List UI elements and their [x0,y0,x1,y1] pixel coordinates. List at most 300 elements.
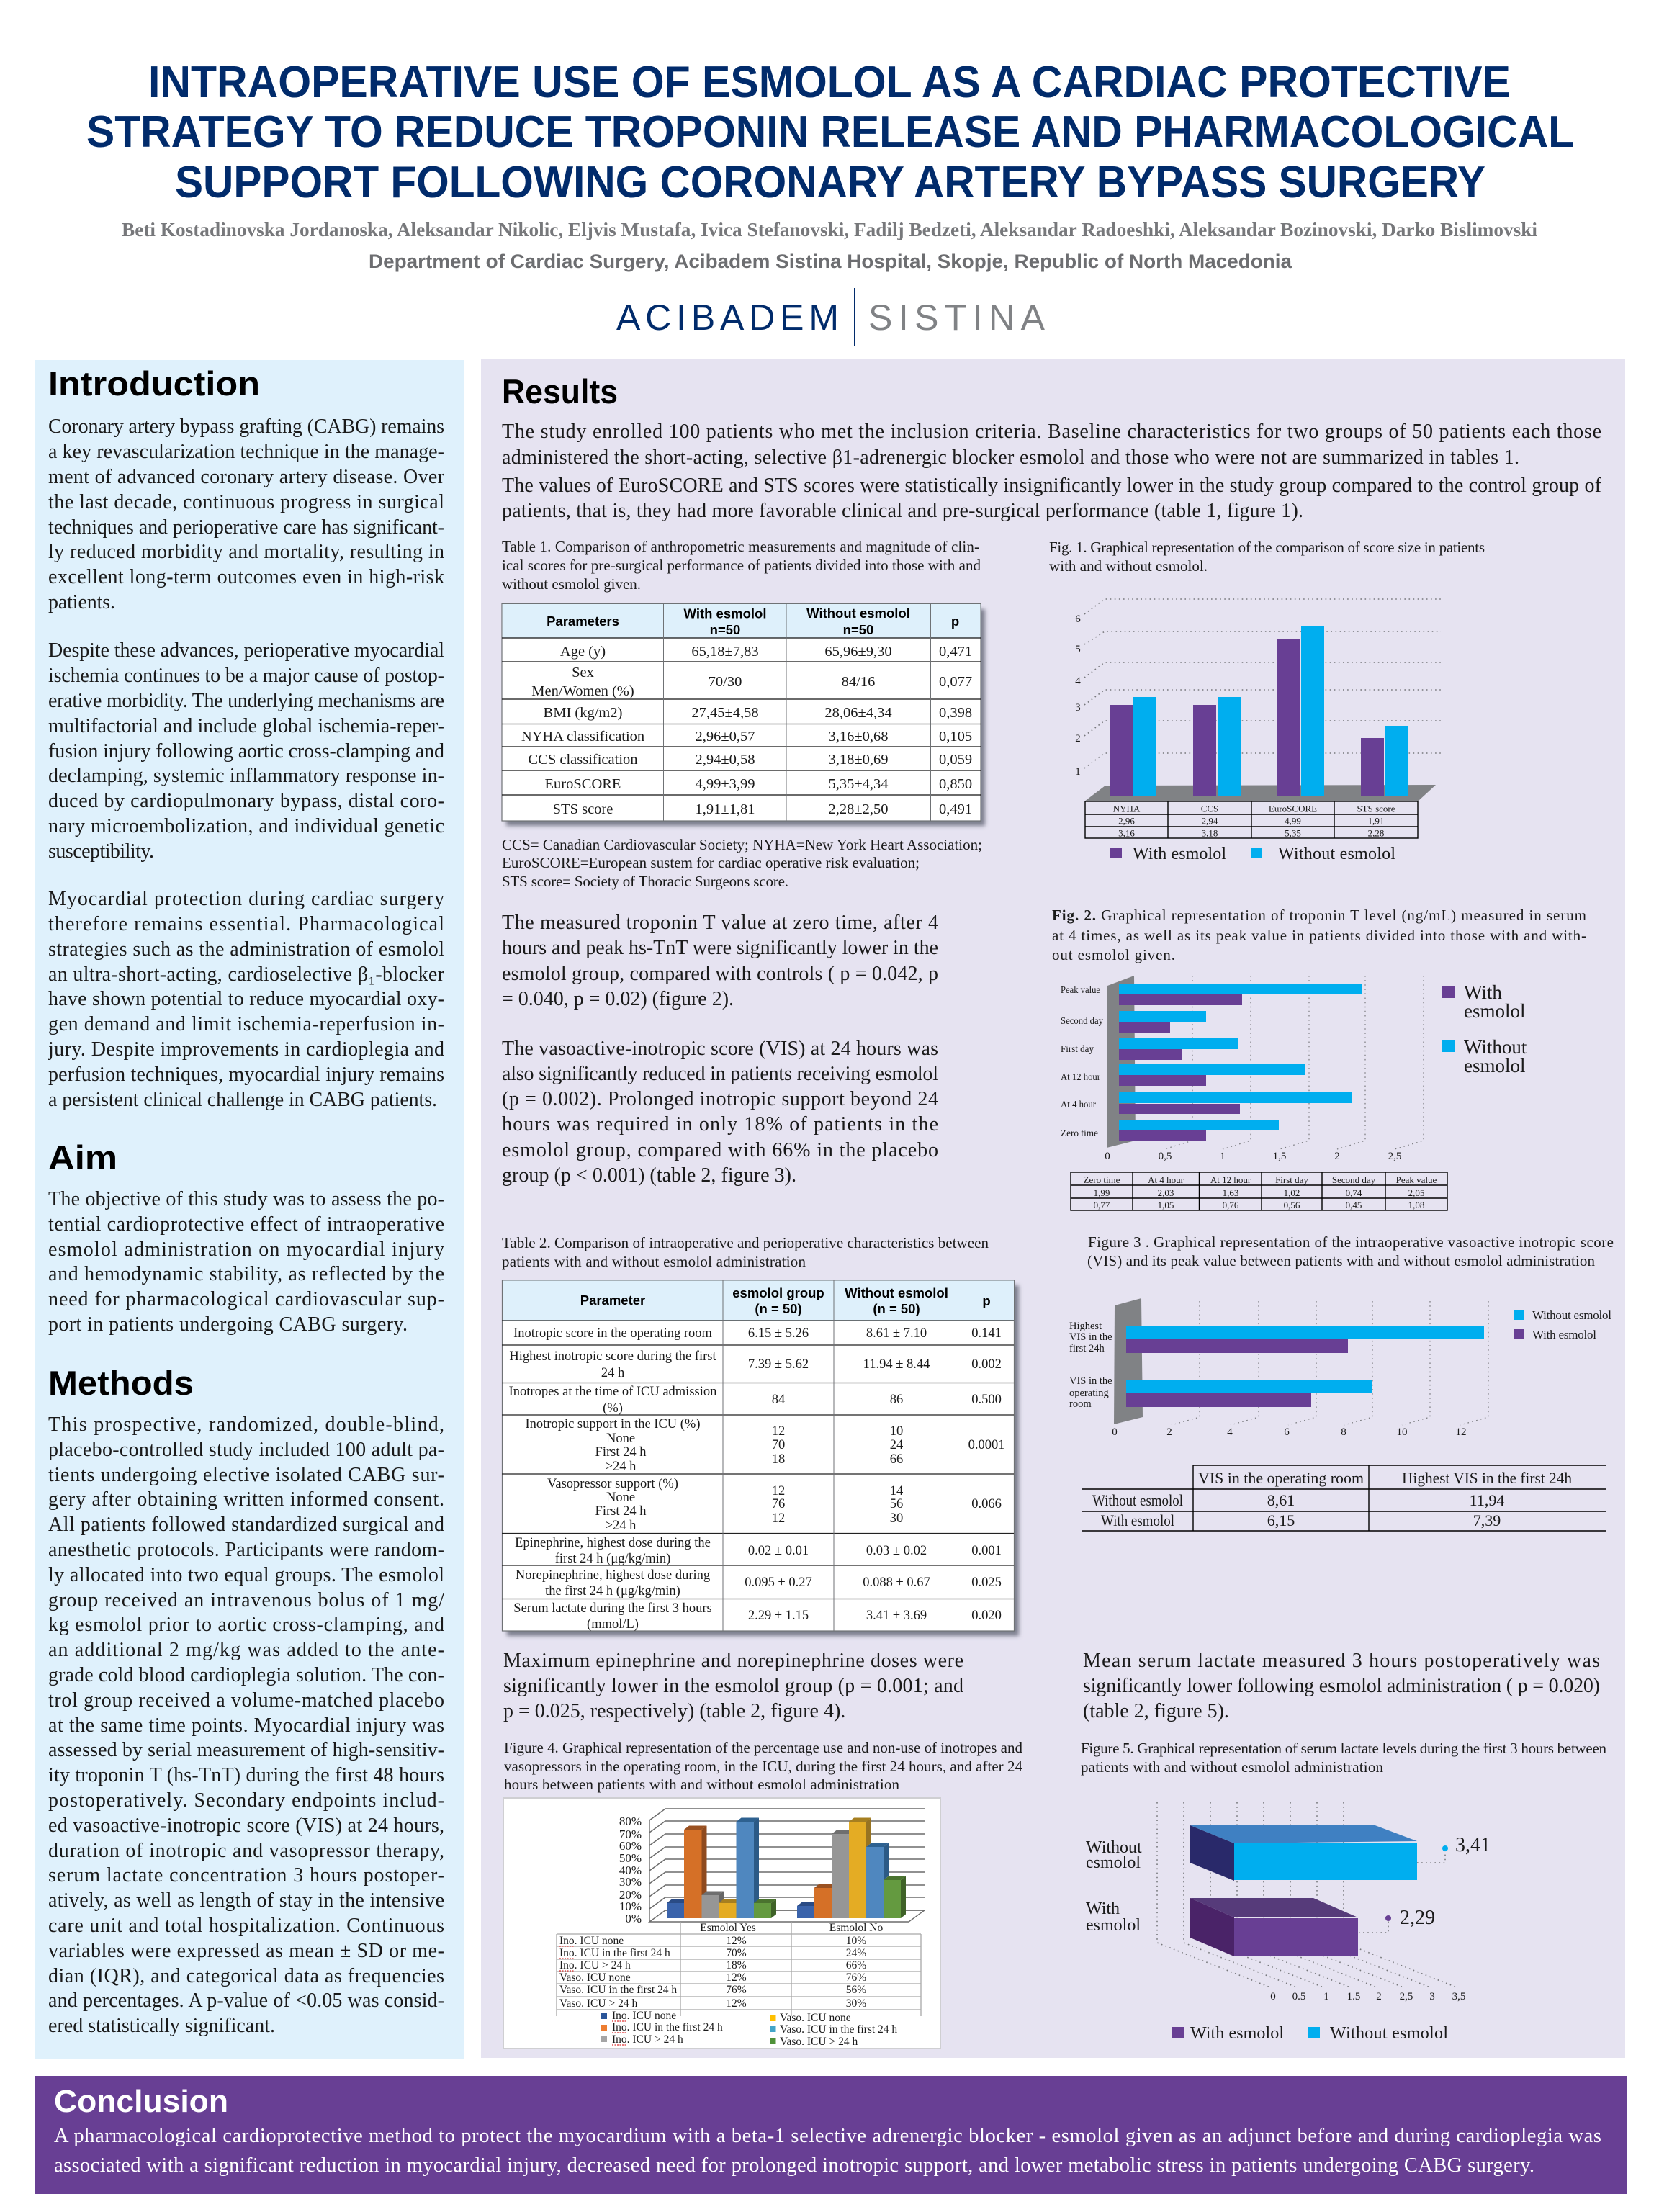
figure 2: At 12 hour [1061,1071,1100,1082]
figure 3 [1069,1233,1614,1531]
table 2: 2.29 ± 1.15 [748,1609,809,1623]
caption: table 1 [502,538,981,593]
figure 1: 5 [1075,644,1081,655]
figure 2: 2,5 [1388,1151,1401,1162]
data table: figure 4: 18% [726,1959,747,1972]
figure 5: With [1086,1899,1120,1918]
data table: figure 4: Esmolol No [830,1922,883,1934]
text: introduction: a persistent clinical challenge in CABG patients. [48,1089,437,1111]
table 2: Serum lactate during the first 3 hours [513,1601,712,1616]
logo: Acibadem Sistina: SISTINA [868,297,1046,338]
table 1: CCS classification [528,752,638,768]
figure 4: 80% [619,1815,642,1828]
text: troponin results: hours was required in only 18% of patients in the [502,1113,938,1136]
figure 1: 3,16 [1118,828,1135,838]
data table: figure 4: 66% [846,1959,866,1972]
caption: figure 4 [504,1739,1022,1793]
table 1: 4,99±3,99 [695,776,755,792]
table 1: 27,45±4,58 [691,705,759,721]
text: methods: atively, as well as length of stay in the intensive [48,1889,444,1912]
text: introduction: Despite these advances, perioperative myocardial [48,639,444,662]
figure 5 [1081,1740,1607,2043]
figure 2: First day [1061,1043,1094,1054]
legend: figure 4 [601,2010,897,2048]
legend: figure 4: Vaso. ICU > 24 h [780,2036,858,2048]
figure 2: 1,5 [1273,1151,1286,1162]
title [86,58,1574,207]
table 2: 8.61 ± 7.10 [866,1326,927,1341]
table 2: >24 h [606,1460,636,1474]
figure 3: operating [1069,1388,1109,1399]
table 2: esmolol group [732,1285,824,1300]
table 2: 12 [772,1484,785,1498]
title: STRATEGY TO REDUCE TROPONIN RELEASE AND PHARMACOLOGICAL [86,107,1574,157]
footnote: table 1: EuroSCORE=European sustem for cardiac operative risk evaluation; [502,854,920,871]
table 1 [502,538,985,890]
figure 2: 0,76 [1223,1200,1239,1210]
figure 2: 0,56 [1284,1200,1300,1210]
table 2: 3.41 ± 3.69 [866,1609,927,1623]
text: methods: an additional 2 mg/kg was added to the ante- [48,1639,444,1661]
text: methods: serum lactate concentration 3 hours postoper- [48,1864,444,1887]
text: introduction: strategies such as the administration of esmolol [48,938,444,961]
figure 4: 30% [619,1875,642,1889]
3d bar: without esmolol [1190,1825,1417,1881]
figure 3: first 24h [1069,1343,1105,1354]
legend: figure 4: Vaso. ICU in the first 24 h [780,2023,897,2036]
table 1: 0,491 [939,801,972,817]
table 2: 0.500 [971,1393,1002,1407]
table 2: 0.03 ± 0.02 [866,1544,927,1558]
figure 2: 0,5 [1159,1151,1172,1162]
figure 2: At 4 hour [1061,1099,1096,1110]
data table: figure 3: VIS in the operating room [1198,1469,1364,1487]
table 2: 18 [772,1452,785,1467]
data table: figure 4: Ino. ICU none [559,1935,624,1947]
text: methods: ered statistically significant. [48,2015,275,2037]
table 2: Epinephrine, highest dose during the [515,1536,711,1550]
table 1: Sex [572,665,594,680]
text: introduction: therefore remains essential. Pharmacological [48,913,444,935]
text: methods: trol group received a volume-matched placebo [48,1689,444,1712]
table 2: First 24 h [595,1504,646,1519]
data table: figure 3: 8,61 [1267,1491,1295,1509]
table 2: Highest inotropic score during the first [509,1349,716,1364]
legend: figure 4: Ino. ICU in the first 24 h [612,2021,723,2033]
figure 1: 2,28 [1368,828,1384,838]
table 2: 0.066 [971,1497,1002,1511]
table 1: 3,18±0,69 [828,752,889,768]
text: introduction: fusion injury following aortic cross-clamping and [48,740,444,763]
text: introduction: a key revascularization technique in the manage- [48,441,444,463]
text: introduction: an ultra-short-acting, cardioselective β₁-blocker [48,963,445,986]
text: methods: dian (IQR), and categorical data as frequencies [48,1965,444,1987]
text: methods: ed vasoactive-inotropic score (VIS) at 24 hours, [48,1815,444,1837]
figure 2: 0,74 [1346,1187,1362,1198]
table 1: STS score [553,801,613,817]
data table: figure 4: 30% [846,1997,866,2010]
data table: figure 4: 70% [726,1947,747,1959]
footnote: table 1: STS score= Society of Thoracic Surgeons score. [502,873,788,890]
caption: figure 1: with and without esmolol. [1049,557,1208,575]
table 2: first 24 h (μg/kg/min) [555,1552,670,1566]
figure 1: NYHA [1113,804,1141,814]
table 2: 10 [890,1424,903,1439]
table 2: 0.002 [971,1357,1002,1372]
text: methods: tients undergoing elective isolated CABG sur- [48,1464,444,1486]
text: methods: This prospective, randomized, double-blind, [48,1413,444,1436]
figure 2: 2,05 [1408,1187,1424,1198]
bars: esmolol yes [667,1817,776,1918]
authors: Beti Kostadinovska Jordanoska, Aleksandar Nikolic, Eljvis Mustafa, Ivica Stefanovski, Fadilj Bedzeti, Aleksandar Radoeshki, Aleksandar Bozinovski, Darko Bislimovski [122,219,1537,240]
table 2: >24 h [606,1519,636,1533]
text: troponin results: group (p < 0.001) (table 2, figure 3). [502,1164,796,1187]
text: introduction: susceptibility. [48,840,154,863]
caption: figure 5: patients with and without esmolol administration [1081,1758,1384,1776]
caption: figure 5 [1081,1740,1607,1776]
table 2 [502,1234,1019,1636]
table 2: 0.095 ± 0.27 [745,1575,812,1590]
table 1: 0,471 [939,644,972,660]
text: conclusion: A pharmacological cardioprotective method to protect the myocardium with a beta-1 selective adrenergic blocker - esmolol given as an adjunct before and during cardioplegia was [54,2125,1601,2147]
legend: figure 5: With esmolol [1190,2024,1284,2043]
title: SUPPORT FOLLOWING CORONARY ARTERY BYPASS SURGERY [175,158,1485,207]
logo: Acibadem Sistina: ACIBADEM [616,297,839,338]
caption: figure 1 [1049,539,1485,575]
legend: figure 2: Without [1464,1036,1527,1058]
text: lactate findings: (table 2, figure 5). [1083,1700,1229,1722]
heading: methods: Methods [48,1364,194,1402]
table 2: 0.020 [971,1609,1002,1623]
legend: figure 2 [1442,981,1527,1076]
text: introduction: declamping, systemic inflammatory response in- [48,765,444,787]
figure 4: 70% [619,1827,642,1841]
text: epinephrine findings [503,1650,963,1722]
text: introduction: jury. Despite improvements in cardioplegia and [48,1038,444,1061]
table 1: 0,077 [939,674,972,690]
table 2: 12 [772,1424,785,1439]
3d bar: with esmolol [1190,1898,1358,1956]
legend: figure 1: With esmolol [1133,845,1226,863]
text: conclusion [54,2125,1601,2177]
caption: figure 3: Figure 3 . Graphical representation of the intraoperative vasoactive inotropic score [1088,1233,1614,1251]
text: introduction: ment of advanced coronary artery disease. Over [48,466,445,488]
text: results summary: administered the short-acting, selective β1-adrenergic blocker esmolol and those who were not are summarized in tables 1. [502,446,1519,469]
text: introduction: erative morbidity. The underlying mechanisms are [48,690,444,712]
footnote: table 1: CCS= Canadian Cardiovascular Society; NYHA=New York Heart Association; [502,836,982,853]
table 2: 86 [890,1393,903,1407]
text: results summary: The study enrolled 100 patients who met the inclusion criteria. Baseline characteristics for two groups of 50 patients each those [502,421,1601,443]
figure 5: 0 [1270,1991,1276,2002]
table 1: 84/16 [842,674,875,690]
figure 2: Zero time [1084,1174,1120,1185]
text: epinephrine findings: p = 0.025, respectively) (table 2, figure 4). [503,1700,845,1722]
caption: figure 3: (VIS) and its peak value between patients with and without esmolol administration [1087,1252,1596,1269]
caption: figure 2: out esmolol given. [1052,946,1175,963]
heading: introduction: Introduction [48,364,260,403]
heading: results: Results [502,372,618,410]
figure 3: 10 [1397,1426,1407,1438]
figure 2: 2 [1334,1151,1340,1162]
data table: figure 4: 12% [726,1972,747,1984]
callout: 3,41 [1417,1834,1491,1863]
text: introduction: gen demand and limit ischemia-reperfusion in- [48,1013,444,1035]
text: lactate findings: Mean serum lactate measured 3 hours postoperatively was [1083,1650,1600,1672]
figure 2: 0,77 [1094,1200,1110,1210]
text: troponin results: esmolol group, compared with controls ( p = 0.042, p [502,963,938,985]
text: methods [48,1413,444,2037]
table 2: Inotropic support in the ICU (%) [525,1417,701,1431]
legend: figure 1: Without esmolol [1278,845,1395,863]
figure 1: 3,18 [1202,828,1218,838]
text: methods: postoperatively. Secondary endpoints includ- [48,1789,444,1812]
figure 1: 6 [1075,613,1081,625]
text: introduction: ly reduced morbidity and mortality, resulting in [48,541,444,563]
table 1: 2,94±0,58 [695,752,755,768]
data table: figure 4: 12% [726,1997,747,2010]
caption: figure 4: hours between patients with and without esmolol administration [504,1776,900,1793]
table 2: Norepinephrine, highest dose during [516,1568,710,1583]
data table: figure 4: Vaso. ICU in the first 24 h [559,1984,677,1996]
figure 1: 1 [1075,766,1081,778]
figure 2 [1052,907,1586,1210]
caption: figure 1: Fig. 1. Graphical representation of the comparison of score size in patients [1049,539,1485,556]
figure 1: 2 [1075,733,1081,745]
data table: figure 4: Vaso. ICU > 24 h [559,1997,637,2010]
text: introduction [48,415,445,1111]
table 2: 56 [890,1497,903,1511]
figure 2: 0,45 [1346,1200,1362,1210]
table 2: Without esmolol [845,1285,948,1300]
text: aim: and hemodynamic stability, as reflected by the [48,1263,444,1285]
table 1: Parameters [547,613,619,629]
figure 2: 0 [1105,1151,1110,1162]
data table: figure 3: Highest VIS in the first 24h [1402,1469,1572,1487]
figure 3: 2 [1166,1426,1172,1438]
caption: table 1: ical scores for pre-surgical performance of patients divided into those with and [502,557,981,574]
text: aim: The objective of this study was to assess the po- [48,1188,444,1210]
table 2: 70 [772,1438,785,1452]
table 2: 0.02 ± 0.01 [748,1544,809,1558]
text: methods: placebo-controlled study included 100 adult pa- [48,1439,444,1461]
figure 2: 1,99 [1094,1187,1110,1198]
figure 5: 2 [1376,1991,1382,2002]
legend: figure 3: Without esmolol [1532,1308,1611,1322]
table 2: 14 [890,1484,903,1498]
figure 1: 2,96 [1118,815,1135,827]
table 2: None [606,1491,635,1505]
caption: figure 2 [1052,907,1586,963]
legend: figure 1 [1110,845,1395,863]
caption: figure 2: at 4 times, as well as its peak value in patients divided into those with and with- [1052,927,1586,944]
figure 5: 3,5 [1452,1991,1465,2002]
table 2: Parameter [580,1292,645,1308]
logo: Acibadem Sistina [616,288,1046,346]
caption: table 2: Table 2. Comparison of intraoperative and perioperative characteristics between [502,1234,989,1251]
text: methods: grade cold blood cardioplegia solution. The con- [48,1664,444,1686]
heading: conclusion: Conclusion [54,2084,228,2119]
table 2: 0.001 [971,1544,1002,1558]
text: methods: ity troponin T (hs-TnT) during the first 48 hours [48,1764,444,1786]
legend: figure 5 [1172,2024,1448,2043]
data table: figure 4: 12% [726,1935,747,1947]
legend: figure 3: With esmolol [1532,1328,1596,1341]
figure 5: 1.5 [1347,1991,1360,2002]
data table: figure 3: Without esmolol [1092,1491,1183,1509]
text: methods: at the same time points. Myocardial injury was [48,1714,444,1737]
table 1: With esmolol [684,606,766,621]
table 1: 2,28±2,50 [828,801,889,817]
figure 1: 4 [1075,675,1081,687]
data table: figure 3: With esmolol [1101,1511,1174,1529]
legend: figure 4: Ino. ICU none [612,2010,676,2022]
table 2: 0.0001 [968,1438,1004,1452]
caption: figure 3 [1087,1233,1614,1269]
text: methods: care unit and total hospitalization. Continuous [48,1915,444,1937]
table 2: (n = 50) [873,1301,920,1316]
data table: figure 3 [1082,1465,1606,1531]
text: aim: esmolol administration on myocardial injury [48,1238,444,1261]
text: methods: gery after obtaining written informed consent. [48,1488,444,1511]
text: introduction: Coronary artery bypass grafting (CABG) remains [48,415,444,438]
table 1: 3,16±0,68 [828,729,889,745]
table 2: 84 [772,1393,785,1407]
legend: figure 4: Ino. ICU > 24 h [612,2033,683,2046]
table 1: EuroSCORE [545,776,621,792]
figure 3: 12 [1456,1426,1466,1438]
text: methods: kg esmolol prior to aortic cross-clamping, and [48,1614,444,1636]
legend: figure 2: With [1464,981,1502,1003]
text: methods: assessed by serial measurement of high-sensitiv- [48,1739,444,1761]
table 1: p [951,613,959,629]
text: aim: port in patients undergoing CABG surgery. [48,1313,408,1336]
figure 2: 1,05 [1158,1200,1174,1210]
table 2: 0.088 ± 0.67 [863,1575,930,1590]
table 1: 2,96±0,57 [695,729,755,745]
text: methods: ly allocated into two equal groups. The esmolol [48,1564,444,1586]
figure 5: 0.5 [1292,1991,1305,2002]
text: troponin results: The measured troponin T value at zero time, after 4 [502,912,938,934]
caption: figure 4: Figure 4. Graphical representation of the percentage use and non-use of inotropes and [504,1739,1022,1756]
table 2: 12 [772,1511,785,1526]
figure 4 [503,1739,1022,2049]
data table: figure 4 [557,1922,921,2016]
figure 3: VIS in the [1069,1375,1112,1387]
figure 5: esmolol [1086,1916,1141,1935]
text: introduction: patients. [48,591,115,613]
affiliation: Department of Cardiac Surgery, Acibadem Sistina Hospital, Skopje, Republic of North Macedonia [369,251,1292,272]
footnote: table 1 [502,836,982,890]
text: introduction: duced by cardiopulmonary bypass, distal coro- [48,790,444,812]
figure 2: Peak value [1061,984,1100,995]
figure 3: room [1069,1398,1092,1410]
text: lactate findings: significantly lower following esmolol administration ( p = 0.020) [1083,1675,1600,1697]
table 1: 0,850 [939,776,972,792]
table 1: n=50 [710,622,740,637]
table 2: (mmol/L) [587,1617,639,1632]
callout: 2,29 [1359,1907,1435,1933]
figure 1: 1,91 [1368,815,1384,827]
heading: aim: Aim [48,1138,117,1177]
figure 5: 1 [1323,1991,1329,2002]
figure 4: 0% [625,1912,642,1925]
figure 2: 1,02 [1284,1187,1300,1198]
text: troponin results: esmolol group, compared with 66% in the placebo [502,1139,938,1161]
table 1: 0,105 [939,729,972,745]
text: introduction: ischemia continues to be a major cause of postop- [48,665,444,687]
text: troponin results: The vasoactive-inotropic score (VIS) at 24 hours was [502,1038,938,1060]
figure 2: 1 [1220,1151,1226,1162]
callout: 3,41: 3,41 [1455,1834,1491,1856]
callout: 2,29: 2,29 [1400,1907,1435,1929]
table 2: 7.39 ± 5.62 [748,1357,809,1372]
figure 3: 6 [1284,1426,1290,1438]
panel: results [481,359,1625,2058]
text: epinephrine findings: significantly lower in the esmolol group (p = 0.001; and [503,1675,963,1697]
table 2: 66 [890,1452,903,1467]
table 2: 30 [890,1511,903,1526]
figure 1: 2,94 [1202,815,1218,827]
data table: figure 4: 56% [846,1984,866,1996]
table 2: 0.025 [971,1575,1002,1590]
table 2: the first 24 h (μg/kg/min) [545,1584,680,1599]
text: troponin results: hours and peak hs-TnT were significantly lower in the [502,937,938,959]
figure 1: CCS [1201,804,1218,814]
table 2: None [606,1431,635,1446]
table 2: 24 h [601,1366,624,1380]
text: troponin results: also significantly reduced in patients receiving esmolol [502,1063,938,1085]
table 2: 6.15 ± 5.26 [748,1326,809,1341]
text: introduction: Myocardial protection during cardiac surgery [48,888,444,910]
title: INTRAOPERATIVE USE OF ESMOLOL AS A CARDIAC PROTECTIVE [148,58,1511,107]
table 2: (n = 50) [755,1301,802,1316]
caption: figure 4: vasopressors in the operating room, in the ICU, during the first 24 hours, and after 24 [504,1758,1022,1775]
figure 3: 8 [1341,1426,1346,1438]
figure 2: 1,08 [1408,1200,1424,1210]
table 2: Vasopressor support (%) [547,1477,678,1491]
figure 2: At 12 hour [1210,1174,1251,1185]
figure 5: Without [1086,1838,1142,1857]
text: results summary: patients, that is, they had more favorable clinical and pre-surgical performance (table 1, figure 1). [502,500,1303,522]
text: introduction: nary microembolization, and individual genetic [48,815,444,837]
table 1: BMI (kg/m2) [544,705,622,721]
table 1: 5,35±4,34 [828,776,889,792]
text: aim [48,1188,444,1336]
data table: figure 4: 24% [846,1947,866,1959]
table 2: 76 [772,1497,785,1511]
table 2: First 24 h [595,1445,646,1460]
text: troponin results [502,912,938,1187]
figure 1: 3 [1075,702,1081,714]
text: introduction: techniques and perioperative care has significant- [48,516,444,539]
table 2: 24 [890,1438,903,1452]
figure 2: Second day [1061,1015,1103,1026]
legend: figure 2: esmolol [1464,1000,1525,1022]
data table: figure 3: 7,39 [1473,1511,1501,1529]
table 1: 0,059 [939,752,972,768]
figure 1: STS score [1357,804,1395,814]
figure 2: 1,63 [1223,1187,1238,1198]
figure 2: Zero time [1061,1128,1098,1138]
figure 4: 60% [619,1839,642,1853]
table 2: Inotropes at the time of ICU admission [509,1385,716,1399]
text: introduction: excellent long-term outcomes even in high-risk [48,566,444,588]
data table: figure 3: 11,94 [1470,1491,1504,1509]
text: troponin results: = 0.040, p = 0.02) (figure 2). [502,988,734,1010]
text: aim: need for pharmacological cardiovascular sup- [48,1288,444,1310]
table 1: Age (y) [560,644,606,660]
caption: table 1: Table 1. Comparison of anthropometric measurements and magnitude of clin- [502,538,979,555]
